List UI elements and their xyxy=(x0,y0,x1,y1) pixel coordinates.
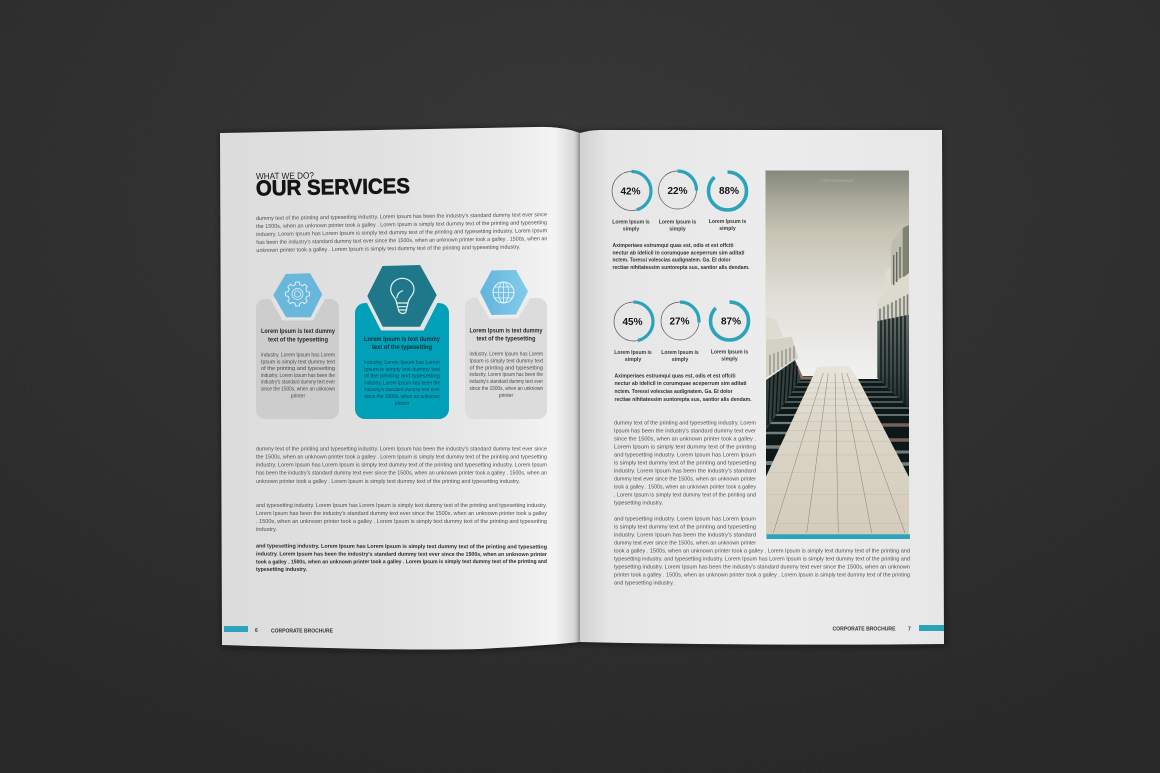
footer: right page: 7 xyxy=(908,626,911,632)
text block: lower paragraph: industry. xyxy=(256,527,277,533)
chart labels: row 1: simply xyxy=(669,226,686,232)
text block: middle paragraph: dummy text of the printing and typesetting industry. Lorem Ipsum has been the industry's standard dummy text ever since xyxy=(256,446,547,452)
text block: right column paragraph 1: and typesetting industry. Lorem Ipsum has Lorem Ipsum xyxy=(614,452,756,458)
card 3 text xyxy=(470,352,544,399)
text block: middle paragraph: has been the industry's standard dummy text ever since the 1500s, when an unknown printer took a galley . 1500s, when an xyxy=(256,471,547,477)
text block: row 1 description: Aximperiaes estrumqui quas est, odis et est offciti xyxy=(612,243,734,249)
text block: right column paragraph 2: printer took a galley . 1500s, when an unknown printer took a galley . Lorem Ipsum is simply text dummy text of the printing xyxy=(614,572,910,578)
chart labels: row 1: Lorem Ipsum is xyxy=(709,219,746,225)
chart: donut 87%: 87% xyxy=(721,316,741,328)
chart labels: row 2: Lorem Ipsum is xyxy=(711,350,748,356)
text block: row 2 description xyxy=(614,374,752,403)
text block: row 2 description: nctem. Toressi volescias audignatem. Ga. Et dolor xyxy=(614,389,733,395)
chart labels: row 2: simply xyxy=(672,357,688,363)
chart: donut 27%: 27% xyxy=(670,316,690,328)
panel: left brochure page xyxy=(220,127,582,651)
text block: row 1 description: nctem. Toressi volescias audignatem. Ga. Et dolor xyxy=(612,258,731,264)
text block: intro paragraph: the 1500s, when an unknown printer took a galley . Lorem Ipsum is simply text dummy text of the printing and typesetting xyxy=(256,220,547,230)
text block: right column paragraph 2: typesetting industry. and typesetting industry. Lorem Ipsum has Lorem Ipsum is simply text dummy text of the printing and xyxy=(614,556,910,562)
card 1 text: industry. Lorem Ipsum has Lorem xyxy=(261,352,335,358)
card 2 text: since the 1500s, when an unknown xyxy=(364,394,440,400)
chart labels: row 1: simply xyxy=(719,226,736,232)
card 1 text xyxy=(261,352,336,399)
chart: donut 45% xyxy=(614,302,653,341)
card 3 text: Ipsum is simply text dummy text xyxy=(470,358,544,364)
card 2 text: industry. Lorem Ipsum has Lorem xyxy=(364,360,440,366)
icon: gear hexagon xyxy=(273,273,322,317)
text block: intro paragraph: has been the industry's standard dummy text ever since the 1500s, when an unknown printer took a galley . 1500s, when an xyxy=(256,236,547,246)
card 3 text: industry's standard dummy text ever xyxy=(470,379,543,385)
chart: donut 22% xyxy=(658,171,696,209)
card 3 heading: Lorem Ipsum is text dummy xyxy=(470,327,543,334)
text block: bold paragraph: typesetting industry. xyxy=(256,567,307,573)
text block: right column paragraph 1: is simply text dummy text of the printing and typesetting xyxy=(614,460,756,466)
text block: right column paragraph 1: dummy text of the printing and typesetting industry. Lorem xyxy=(614,420,756,426)
photo: modern building xyxy=(765,170,910,539)
text block: row 1 description: nectur ab idelicil in corumquae aceperrum sim aditati xyxy=(612,250,745,256)
text block: middle paragraph: industry. Lorem Ipsum has Lorem Ipsum is simply text dummy text of the printing and typesetting industry. Lorem Ipsum xyxy=(256,462,547,468)
card 3 text: of the printing and typesetting xyxy=(470,365,543,371)
text block: middle paragraph: unknown printer took a galley . Lorem Ipsum is simply text dummy text of the printing and typesetting industry. xyxy=(256,479,520,485)
footer: left page: 6 xyxy=(255,628,258,634)
card 3 text: industry. Lorem Ipsum has been the xyxy=(470,372,543,378)
card 2 text: Ipsum is simply text dummy text xyxy=(364,367,441,373)
chart: donut 45%: 45% xyxy=(622,317,642,328)
chart: donut 22%: 22% xyxy=(668,186,688,197)
card 1 text: of the printing and typesetting xyxy=(261,366,335,372)
text block: bold paragraph: and typesetting industry. Lorem Ipsum has Lorem Ipsum is simply text dummy text of the printing and typesetting xyxy=(256,544,547,551)
walkway xyxy=(765,365,910,536)
chart labels: row 2: simply xyxy=(625,357,641,363)
text block: bold paragraph xyxy=(256,544,548,573)
chart labels: row 2 xyxy=(614,350,748,363)
footer: right page: CORPORATE BROCHURE xyxy=(832,626,896,632)
card 1 text: printer xyxy=(291,393,306,399)
text block: row 2 description: nectur ab idelicil in corumquae aceperrum sim aditati xyxy=(614,381,747,387)
card 3 heading xyxy=(470,327,543,342)
card 1 text: industry's standard dummy text ever xyxy=(261,380,335,386)
text block: right column paragraph 1: Lorem Ipsum is simply text dummy text of the printing xyxy=(614,444,756,450)
chart: donut 27% xyxy=(661,302,699,340)
card 1 heading: text of the typesetting xyxy=(268,336,328,343)
card 3 text: printer xyxy=(499,393,514,399)
card 2 text: of the printing and typesetting xyxy=(364,374,440,380)
footer: left page xyxy=(224,626,333,634)
title: our services: OUR SERVICES xyxy=(256,174,410,200)
small caption on photo: CORPORATE BRANDS xyxy=(820,179,854,183)
text block: right column paragraph 1 xyxy=(614,420,756,506)
panel: service card 2 highlighted xyxy=(355,265,449,419)
chart labels: row 2: Lorem Ipsum is xyxy=(614,350,652,356)
text block: right column paragraph 1: typesetting industry. xyxy=(614,500,663,506)
chart: donut 42% xyxy=(612,172,651,210)
text block: right column paragraph 2 xyxy=(614,516,910,586)
card 2 text: industry. Lorem Ipsum has been the xyxy=(364,380,440,386)
panel: right brochure page xyxy=(580,130,945,647)
panel: service card 3 xyxy=(465,270,547,419)
text block: right column paragraph 2: industry. Lorem Ipsum has been the industry's standard xyxy=(614,532,756,538)
card 2 heading: Lorem Ipsum is text dummy xyxy=(364,336,441,343)
heading: what we do: WHAT WE DO? xyxy=(256,170,314,181)
text block: intro paragraph xyxy=(256,212,548,254)
text block: bold paragraph: industry. Lorem Ipsum has been the industry's standard dummy text ever since the 1500s, when an unknown printer xyxy=(256,552,548,558)
text block: intro paragraph: unknown printer took a galley . Lorem Ipsum is simply text dummy text of the printing and typesetting industry. xyxy=(256,245,521,254)
text block: right column paragraph 1: dummy text ever since the 1500s, when an unknown printer xyxy=(614,476,756,482)
footer: right page xyxy=(832,625,944,632)
text block: right column paragraph 1: took a galley . 1500s, when an unknown printer took a galley xyxy=(614,484,756,490)
card 1 text: industry. Lorem Ipsum has been the xyxy=(261,373,335,379)
text block: row 2 description: Aximperiaes estrumqui quas est, odis et est offciti xyxy=(614,374,736,380)
text block: right column paragraph 2: typesetting industry. Lorem Ipsum has been the industry's standard dummy text ever since the 1500s, when an unknown xyxy=(614,564,910,570)
dark stairs left xyxy=(766,376,814,478)
text block: intro paragraph: industry. Lorem Ipsum has Lorem Ipsum is simply text dummy text of the printing and typesetting industry. Lorem Ipsum xyxy=(256,228,548,238)
text block: right column paragraph 2: and typesetting industry. Lorem Ipsum has Lorem Ipsum xyxy=(614,516,756,522)
card 1 heading: Lorem Ipsum is text dummy xyxy=(261,328,335,335)
chart labels: row 2: simply xyxy=(721,356,738,362)
dark stairs right xyxy=(858,379,909,478)
chart labels: row 1: Lorem Ipsum is xyxy=(659,220,696,226)
card 2 text: industry's standard dummy text ever xyxy=(364,387,440,393)
text block: right column paragraph 2: took a galley . 1500s, when an unknown printer took a galley . Lorem Ipsum is simply text dummy text of the printing and xyxy=(614,548,910,554)
chart labels: row 2: Lorem Ipsum is xyxy=(661,350,699,356)
card 2 text xyxy=(364,360,441,407)
card 3 text: industry. Lorem Ipsum has Lorem xyxy=(470,352,543,358)
chart: donut 88%: 88% xyxy=(719,186,739,197)
text block: row 2 description: rectiae nihitatessim suntorepta sus, santior alis dendam. xyxy=(614,397,752,403)
card 1 heading xyxy=(261,328,335,343)
text block: middle paragraph: the 1500s, when an unknown printer took a galley . Lorem Ipsum is simply text dummy text of the printing and typesetting xyxy=(256,454,547,460)
card 2 text: printer xyxy=(395,401,410,407)
text block: right column paragraph 2: dummy text ever since the 1500s, when an unknown printer xyxy=(614,540,756,546)
text block: row 1 description xyxy=(612,243,750,271)
text block: right column paragraph 1: industry. Lorem Ipsum has been the industry's standard xyxy=(614,468,756,474)
card 1 text: since the 1500s, when an unknown xyxy=(261,386,335,392)
card 2 heading xyxy=(364,336,441,351)
chart: donut 88% xyxy=(708,172,746,210)
card 1 text: Ipsum is simply text dummy text xyxy=(261,359,336,365)
chart labels: row 1 xyxy=(612,219,746,232)
left wing xyxy=(766,317,803,430)
text block: lower paragraph: Lorem Ipsum has been the industry's standard dummy text ever since the 1500s, when an unknown printer took a galley xyxy=(256,511,547,517)
text block: lower paragraph xyxy=(256,503,547,533)
card 3 text: since the 1500s, when an unknown xyxy=(470,386,543,392)
chart labels: row 1: Lorem Ipsum is xyxy=(612,220,650,226)
text block: middle paragraph xyxy=(256,446,547,485)
text block: right column paragraph 1: since the 1500s, when an unknown printer took a galley . xyxy=(614,436,756,442)
chart: donut 42%: 42% xyxy=(620,186,640,198)
card 2 heading: text of the typesetting xyxy=(372,344,432,351)
text block: lower paragraph: and typesetting industry. Lorem Ipsum has Lorem Ipsum is simply text dummy text of the printing and typesetting industry. xyxy=(256,503,547,509)
teal bar under photo xyxy=(766,534,910,539)
footer: left page: CORPORATE BROCHURE xyxy=(271,628,333,634)
right tower xyxy=(877,225,909,321)
text block: intro paragraph: dummy text of the printing and typesetting industry. Lorem Ipsum has been the industry's standard dummy text ever since xyxy=(256,212,547,222)
card 3 heading: text of the typesetting xyxy=(476,336,536,342)
chart labels: row 1: simply xyxy=(623,226,639,232)
text block: bold paragraph: took a galley . 1500s, when an unknown printer took a galley . Lorem Ipsum is simply text dummy text of the printing and xyxy=(256,559,547,565)
text block: right column paragraph 1: Ipsum has been the industry's standard dummy text ever xyxy=(614,428,756,434)
chart: donut 87% xyxy=(710,302,748,340)
icon: globe hexagon xyxy=(480,270,528,315)
text block: lower paragraph: . 1500s, when an unknown printer took a galley . Lorem Ipsum is simply text dummy text of the printing and typesetting xyxy=(256,519,547,525)
text block: right column paragraph 2: and typesetting industry. xyxy=(614,580,674,586)
dark building columns right xyxy=(877,314,909,408)
icon: light bulb hexagon xyxy=(367,265,437,327)
text block: right column paragraph 2: is simply text dummy text of the printing and typesetting xyxy=(614,524,756,530)
text block: right column paragraph 1: . Lorem Ipsum is simply text dummy text of the printing and xyxy=(614,492,756,498)
panel: service card 1 xyxy=(256,273,339,419)
text block: row 1 description: rectiae nihitatessim suntorepta sus, santior alis dendam. xyxy=(612,265,750,271)
